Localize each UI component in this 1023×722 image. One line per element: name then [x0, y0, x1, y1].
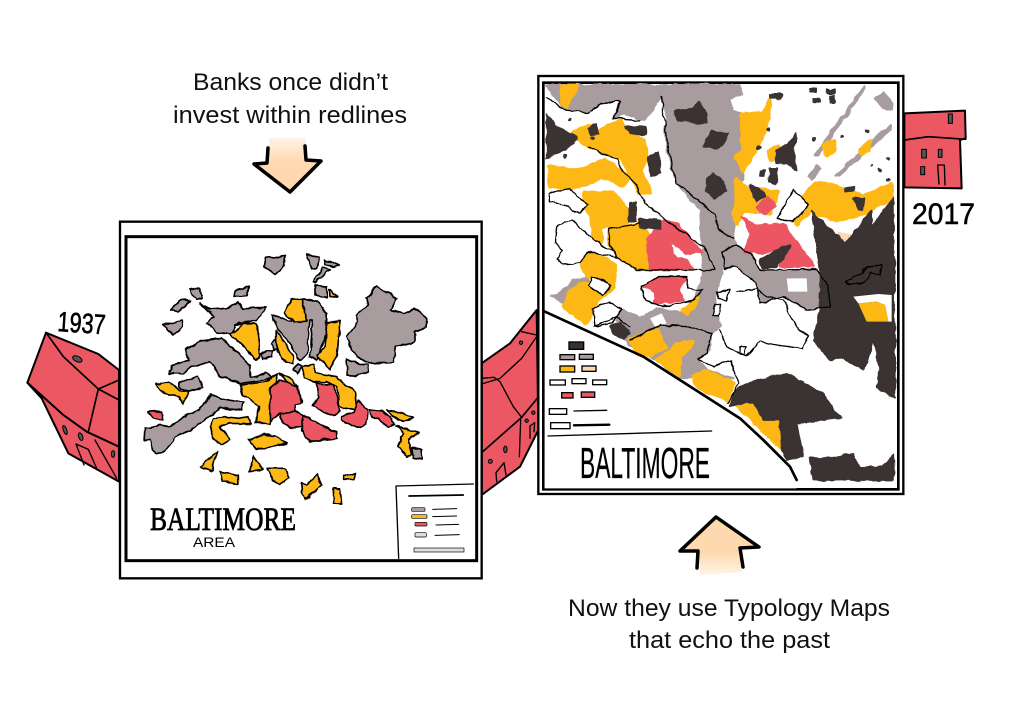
map: diagonal edge and white legend area: [545, 312, 797, 488]
arrow: pointing up to 2017 map: [680, 517, 760, 575]
illustration: 2017 red building: [904, 111, 966, 188]
caption: banks once didn't invest: Banks once didn’t: [193, 69, 388, 96]
title: Baltimore Area: AREA: [193, 534, 236, 550]
map: red 2017 typology areas: [643, 197, 815, 303]
map: red 1937 districts: [147, 380, 395, 442]
map: gray 2017 typology areas: [546, 85, 894, 378]
caption: banks once didn't invest: [173, 69, 407, 129]
map: yellow 1937 districts: [155, 290, 418, 503]
arrow: pointing down to 1937 map: [254, 138, 321, 192]
map: outlined tract boundaries: [546, 97, 882, 403]
map: yellow 2017 typology areas: [550, 87, 892, 447]
illustration: 2017 building wrapping behind maps: [482, 310, 538, 495]
title: Baltimore: BALTIMORE: [580, 439, 710, 488]
caption: now they use typology maps: [568, 595, 890, 654]
caption: now they use typology maps: Now they use Typology Maps: [568, 595, 890, 622]
map: white pockets in gray: [650, 97, 807, 327]
caption: now they use typology maps: that echo the past: [629, 627, 830, 654]
map: pockets inside dark area: [853, 294, 892, 322]
title: Baltimore Area: [150, 502, 296, 550]
map: dark 2017 typology areas: [547, 88, 895, 480]
title: Baltimore Area: BALTIMORE: [150, 502, 296, 538]
map: peach area: [837, 232, 863, 253]
caption: banks once didn't invest: invest within redlines: [173, 102, 407, 129]
map: gray 1937 districts: [144, 255, 427, 460]
legend: 2017 map key: [548, 342, 712, 436]
panel: 2017 Baltimore typology map: [538, 76, 903, 494]
illustration: 1937 red building: [27, 333, 119, 482]
year label 1937: 1937: [57, 306, 107, 340]
panel: 1937 Baltimore redlining map: [120, 222, 482, 578]
legend: 1937 map key: [396, 484, 473, 558]
year label 2017: 2017: [912, 198, 975, 231]
